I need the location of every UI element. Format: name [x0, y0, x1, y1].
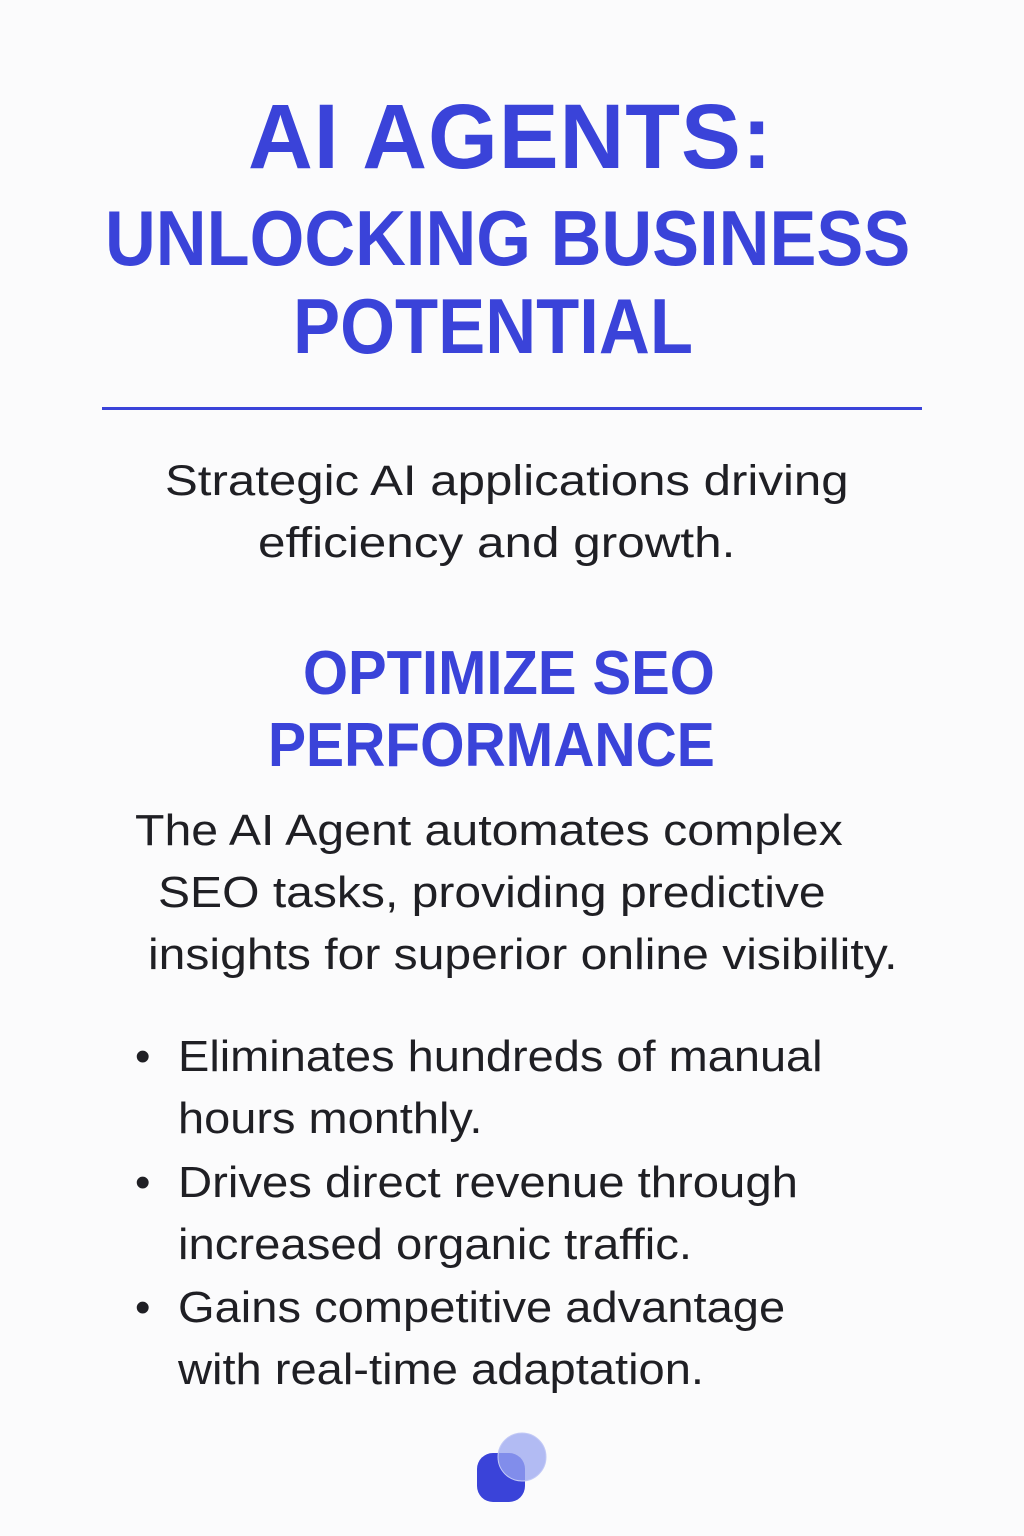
- title line 3: POTENTIAL: [293, 282, 693, 370]
- body text: SEO tasks, providing predictive: [158, 868, 826, 917]
- section heading: OPTIMIZE SEO: [303, 639, 715, 708]
- title: [105, 86, 910, 370]
- bullet 1: Eliminates hundreds of manual: [178, 1032, 823, 1081]
- body text: The AI Agent automates complex: [135, 806, 843, 855]
- bullet 2: •: [135, 1158, 150, 1207]
- bullet 2: Drives direct revenue through: [178, 1158, 798, 1207]
- bullet 1: •: [135, 1032, 150, 1081]
- bullet list: [135, 1032, 823, 1394]
- section heading: [268, 639, 715, 780]
- icon: logo: [477, 1432, 546, 1502]
- bullet 2: increased organic traffic.: [178, 1220, 692, 1269]
- bullet 2: [135, 1158, 798, 1269]
- body text: [135, 806, 898, 979]
- section heading: PERFORMANCE: [268, 711, 715, 780]
- title line 1: AI AGENTS:: [248, 86, 773, 188]
- bullet 3: Gains competitive advantage: [178, 1283, 785, 1332]
- subtitle: efficiency and growth.: [258, 519, 735, 567]
- bullet 3: [135, 1283, 785, 1394]
- bullet 1: hours monthly.: [178, 1094, 482, 1143]
- subtitle: [165, 457, 849, 567]
- title line 2: UNLOCKING BUSINESS: [105, 194, 910, 282]
- bullet 3: •: [135, 1283, 150, 1332]
- body text: insights for superior online visibility.: [148, 930, 898, 979]
- bullet 1: [135, 1032, 823, 1143]
- subtitle: Strategic AI applications driving: [165, 457, 849, 505]
- bullet 3: with real-time adaptation.: [178, 1345, 704, 1394]
